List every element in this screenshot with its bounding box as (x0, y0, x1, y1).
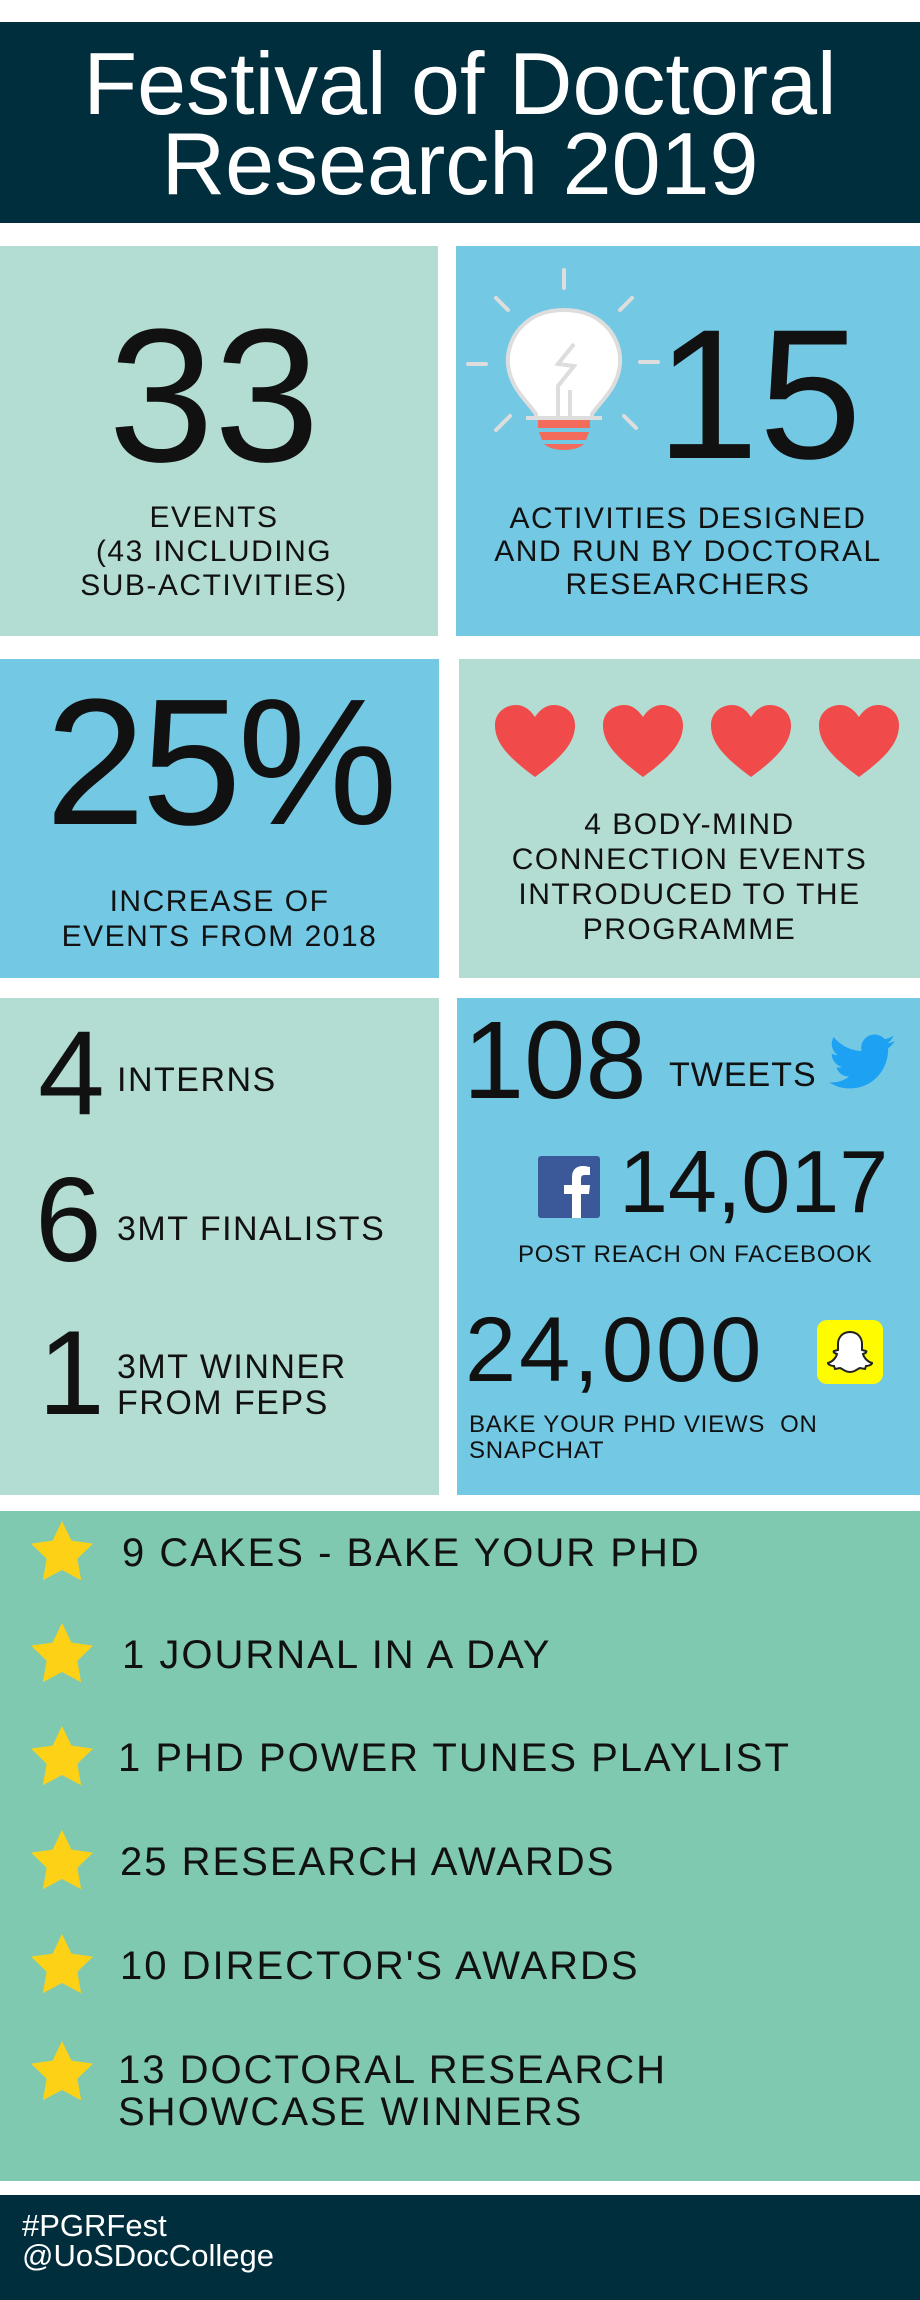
events caption: SUB-ACTIVITIES) (80, 569, 348, 602)
activities caption: RESEARCHERS (566, 568, 810, 601)
icon: facebook (538, 1156, 600, 1218)
stat: 3MT winner: 1 (38, 1306, 105, 1440)
item: playlist (31, 1726, 791, 1786)
stat: snapchat views: 24,000 (465, 1299, 764, 1401)
increase caption: INCREASE OF (110, 885, 329, 918)
footer (0, 2195, 920, 2300)
panel: activities (456, 246, 920, 636)
stat: tweets: 108 (463, 999, 647, 1122)
icon: hearts (495, 705, 899, 777)
panel: body-mind (459, 659, 920, 978)
icon: lightbulb (466, 268, 660, 450)
stat: interns: INTERNS (117, 1061, 277, 1099)
item: showcase winners: SHOWCASE WINNERS (118, 2090, 583, 2134)
events caption (80, 501, 348, 602)
snapchat caption: SNAPCHAT (469, 1437, 604, 1464)
title bar: Research 2019 (162, 114, 758, 213)
stat: facebook reach: 14,017 (619, 1132, 888, 1231)
panel: social media (457, 998, 920, 1495)
stat: 3MT finalists: 6 (35, 1153, 102, 1287)
stat: tweets (463, 999, 895, 1122)
title bar (0, 22, 920, 223)
snapchat caption (469, 1411, 818, 1464)
title bar: Festival of Doctoral (83, 34, 837, 133)
item: research awards: 25 RESEARCH AWARDS (120, 1840, 615, 1884)
item: journal: 1 JOURNAL IN A DAY (122, 1633, 551, 1677)
item: director's awards: 10 DIRECTOR'S AWARDS (120, 1944, 640, 1988)
panel: star list (0, 1511, 920, 2181)
panel: events (0, 246, 438, 636)
number 25%: 25% (45, 662, 394, 863)
item: showcase winners: 13 DOCTORAL RESEARCH (118, 2048, 667, 2092)
item: director's awards (31, 1934, 640, 1994)
item: journal (31, 1623, 551, 1682)
body-mind caption (512, 808, 867, 946)
activities caption: AND RUN BY DOCTORAL (494, 535, 882, 568)
panel: increase (0, 659, 439, 978)
item: playlist: 1 PHD POWER TUNES PLAYLIST (118, 1736, 791, 1780)
icon: snapchat (817, 1320, 883, 1384)
body-mind caption: 4 BODY-MIND (584, 808, 795, 841)
events caption: EVENTS (149, 501, 279, 534)
item: cakes: 9 CAKES - BAKE YOUR PHD (122, 1531, 701, 1575)
events caption: (43 INCLUDING (96, 535, 332, 568)
stat: interns (38, 1006, 277, 1140)
stat: 3MT winner: FROM FEPS (117, 1384, 329, 1422)
stat: 3MT winner: 3MT WINNER (117, 1348, 347, 1386)
number 33: 33 (108, 290, 320, 502)
facebook caption: POST REACH ON FACEBOOK (518, 1241, 873, 1268)
activities caption (494, 502, 882, 601)
stat: 3MT finalists (35, 1153, 385, 1287)
panel: interns & 3MT (0, 998, 439, 1495)
body-mind caption: PROGRAMME (583, 913, 796, 946)
item: showcase winners (31, 2041, 667, 2134)
body-mind caption: INTRODUCED TO THE (518, 878, 861, 911)
increase caption (62, 885, 377, 953)
footer: @UoSDocCollege (22, 2238, 274, 2273)
icon: twitter bird (829, 1034, 895, 1088)
snapchat caption: BAKE YOUR PHD VIEWS ON (469, 1411, 818, 1438)
stat: interns: 4 (38, 1006, 105, 1140)
item: research awards (31, 1830, 615, 1890)
stat: 3MT finalists: 3MT FINALISTS (117, 1210, 385, 1248)
footer: #PGRFest (22, 2208, 167, 2243)
item: cakes (31, 1521, 701, 1580)
increase caption: EVENTS FROM 2018 (62, 920, 377, 953)
stat: tweets: TWEETS (669, 1056, 817, 1094)
body-mind caption: CONNECTION EVENTS (512, 843, 867, 876)
stat: 3MT winner (38, 1306, 347, 1440)
number 15: 15 (656, 292, 862, 498)
activities caption: ACTIVITIES DESIGNED (510, 502, 866, 535)
